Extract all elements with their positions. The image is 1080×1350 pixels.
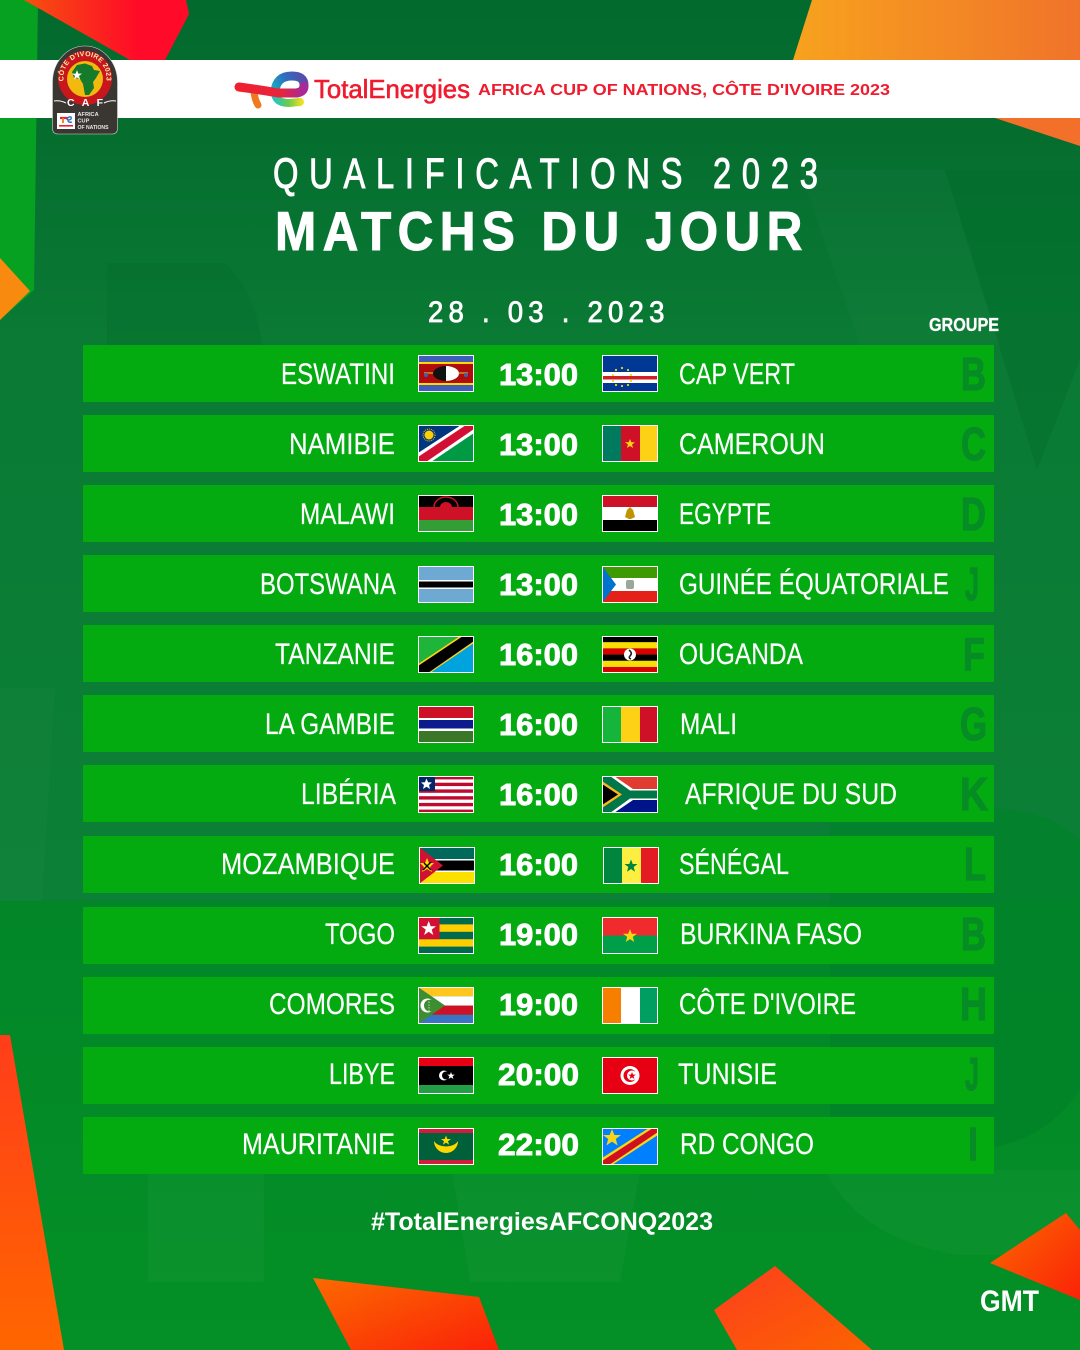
away team: MALI: [680, 708, 737, 741]
CAF badge: [52, 46, 118, 134]
group letter: B: [961, 908, 986, 960]
home team: MOZAMBIQUE: [221, 848, 395, 881]
flag: Togo: [418, 917, 474, 954]
badge medallion: [58, 51, 112, 105]
decoration: bottom-left orange shard: [0, 1035, 64, 1350]
decoration: right orange sliver: [995, 118, 1080, 146]
hashtag: #TotalEnergiesAFCONQ2023: [371, 1208, 713, 1236]
away team: OUGANDA: [679, 638, 803, 671]
group letter: H: [960, 978, 987, 1030]
home team: TOGO: [325, 918, 395, 951]
match row: Namibie v Cameroun: [83, 415, 994, 472]
home team: BOTSWANA: [260, 568, 396, 601]
away team: BURKINA FASO: [680, 918, 862, 951]
flag: Botswana: [418, 566, 474, 603]
kick-off time: 16:00: [499, 847, 578, 882]
kick-off time: 19:00: [499, 987, 578, 1022]
home team: LA GAMBIE: [265, 708, 395, 741]
match row: Libye v Tunisie: [83, 1047, 994, 1104]
flag: Eswatini: [418, 355, 474, 392]
away team: AFRIQUE DU SUD: [685, 778, 897, 811]
group letter: G: [960, 698, 987, 750]
home team: LIBYE: [329, 1058, 395, 1091]
group letter: B: [961, 348, 986, 400]
home team: LIBÉRIA: [301, 778, 396, 811]
match row: Mozambique v Senegal: [83, 836, 994, 893]
TotalEnergies wordmark: TotalEnergies: [314, 74, 470, 104]
kick-off time: 20:00: [498, 1057, 579, 1092]
match row: Malawi v Egypte: [83, 485, 994, 542]
flag: RD Congo: [602, 1128, 658, 1165]
home team: TANZANIE: [275, 638, 395, 671]
home team: COMORES: [269, 988, 395, 1021]
decoration: bottom-right shard: [714, 1266, 872, 1350]
tournament name: AFRICA CUP OF NATIONS, CÔTE D'IVOIRE 2023: [478, 80, 890, 99]
kick-off time: 13:00: [499, 567, 578, 602]
flag: Cote d'Ivoire: [602, 987, 658, 1024]
badge CAF text: CAF: [67, 97, 104, 109]
match row: Tanzanie v Ouganda: [83, 625, 994, 682]
decoration: top-left red shard: [24, 0, 189, 60]
flag: Mozambique: [419, 847, 475, 884]
badge sponsor tile: [57, 113, 75, 129]
flag: Mauritanie: [418, 1128, 474, 1165]
match row: Eswatini v Cap Vert: [83, 345, 994, 402]
group letter: J: [965, 558, 979, 610]
away team: CAP VERT: [679, 358, 795, 391]
home team: ESWATINI: [281, 358, 395, 391]
match row: Liberia v Afrique du Sud: [83, 765, 994, 822]
TotalEnergies logo mark: [239, 76, 304, 105]
title: matchs du jour: MATCHS DU JOUR: [275, 202, 802, 263]
flag: Senegal: [603, 847, 659, 884]
badge curved lines: [54, 101, 116, 103]
match row: La Gambie v Mali: [83, 695, 994, 752]
group letter: I: [968, 1118, 978, 1170]
match row: Comores v Cote d'Ivoire: [83, 977, 994, 1034]
group letter: D: [961, 488, 986, 540]
timezone label: GMT: [980, 1285, 1039, 1318]
flag: Burkina Faso: [602, 917, 658, 954]
flag: Namibie: [418, 425, 474, 462]
kick-off time: 19:00: [499, 917, 578, 952]
away team: CÔTE D'IVOIRE: [679, 987, 856, 1021]
title: qualifications: QUALIFICATIONS 2023: [273, 150, 818, 198]
group letter: J: [965, 1048, 979, 1100]
flag: Mali: [602, 706, 658, 743]
badge ring text: CÔTE D'IVOIRE 2023: [58, 51, 112, 81]
decoration: right corner shard: [990, 1213, 1080, 1300]
kick-off time: 13:00: [499, 427, 578, 462]
away team: EGYPTE: [679, 498, 771, 531]
flag: La Gambie: [418, 706, 474, 743]
away team: TUNISIE: [678, 1058, 777, 1091]
date: 28 . 03 . 2023: [428, 296, 664, 329]
badge caption: CUP: [78, 118, 90, 124]
match row: Mauritanie v RD Congo: [83, 1117, 994, 1174]
home team: MAURITANIE: [242, 1128, 395, 1161]
group letter: L: [964, 838, 986, 890]
flag: Libye: [418, 1057, 474, 1094]
flag: Comores: [418, 987, 474, 1024]
flag: Cameroun: [602, 425, 658, 462]
kick-off time: 13:00: [499, 357, 578, 392]
decoration: left orange arrow: [0, 258, 30, 320]
flag: Ouganda: [602, 636, 658, 673]
kick-off time: 16:00: [499, 637, 578, 672]
flag: Tunisie: [602, 1057, 658, 1094]
match row: Botswana v Guinee Equatoriale: [83, 555, 994, 612]
flag: Afrique du Sud: [602, 776, 658, 813]
match row: Togo v Burkina Faso: [83, 907, 994, 964]
decoration: top-right orange shard: [793, 0, 1080, 60]
group letter: K: [960, 768, 988, 820]
kick-off time: 16:00: [499, 777, 578, 812]
badge caption: AFRICA: [78, 112, 99, 118]
home team: MALAWI: [300, 498, 395, 531]
kick-off time: 22:00: [498, 1127, 579, 1162]
sponsor banner: [0, 60, 1080, 118]
flag: Liberia: [418, 776, 474, 813]
group letter: F: [963, 628, 985, 680]
flag: Guinee Equatoriale: [602, 566, 658, 603]
away team: GUINÉE ÉQUATORIALE: [679, 568, 949, 601]
kick-off time: 13:00: [499, 497, 578, 532]
flag: Malawi: [418, 495, 474, 532]
decoration: bottom-middle shard: [313, 1278, 499, 1350]
badge caption: OF NATIONS: [78, 125, 109, 131]
home team: NAMIBIE: [289, 428, 395, 461]
kick-off time: 16:00: [499, 707, 578, 742]
flag: Cap Vert: [602, 355, 658, 392]
column heading: groupe: GROUPE: [929, 315, 999, 335]
flag: Tanzanie: [418, 636, 474, 673]
away team: RD CONGO: [680, 1128, 814, 1161]
group letter: C: [961, 418, 986, 470]
away team: SÉNÉGAL: [679, 848, 789, 881]
flag: Egypte: [602, 495, 658, 532]
away team: CAMEROUN: [679, 428, 825, 461]
